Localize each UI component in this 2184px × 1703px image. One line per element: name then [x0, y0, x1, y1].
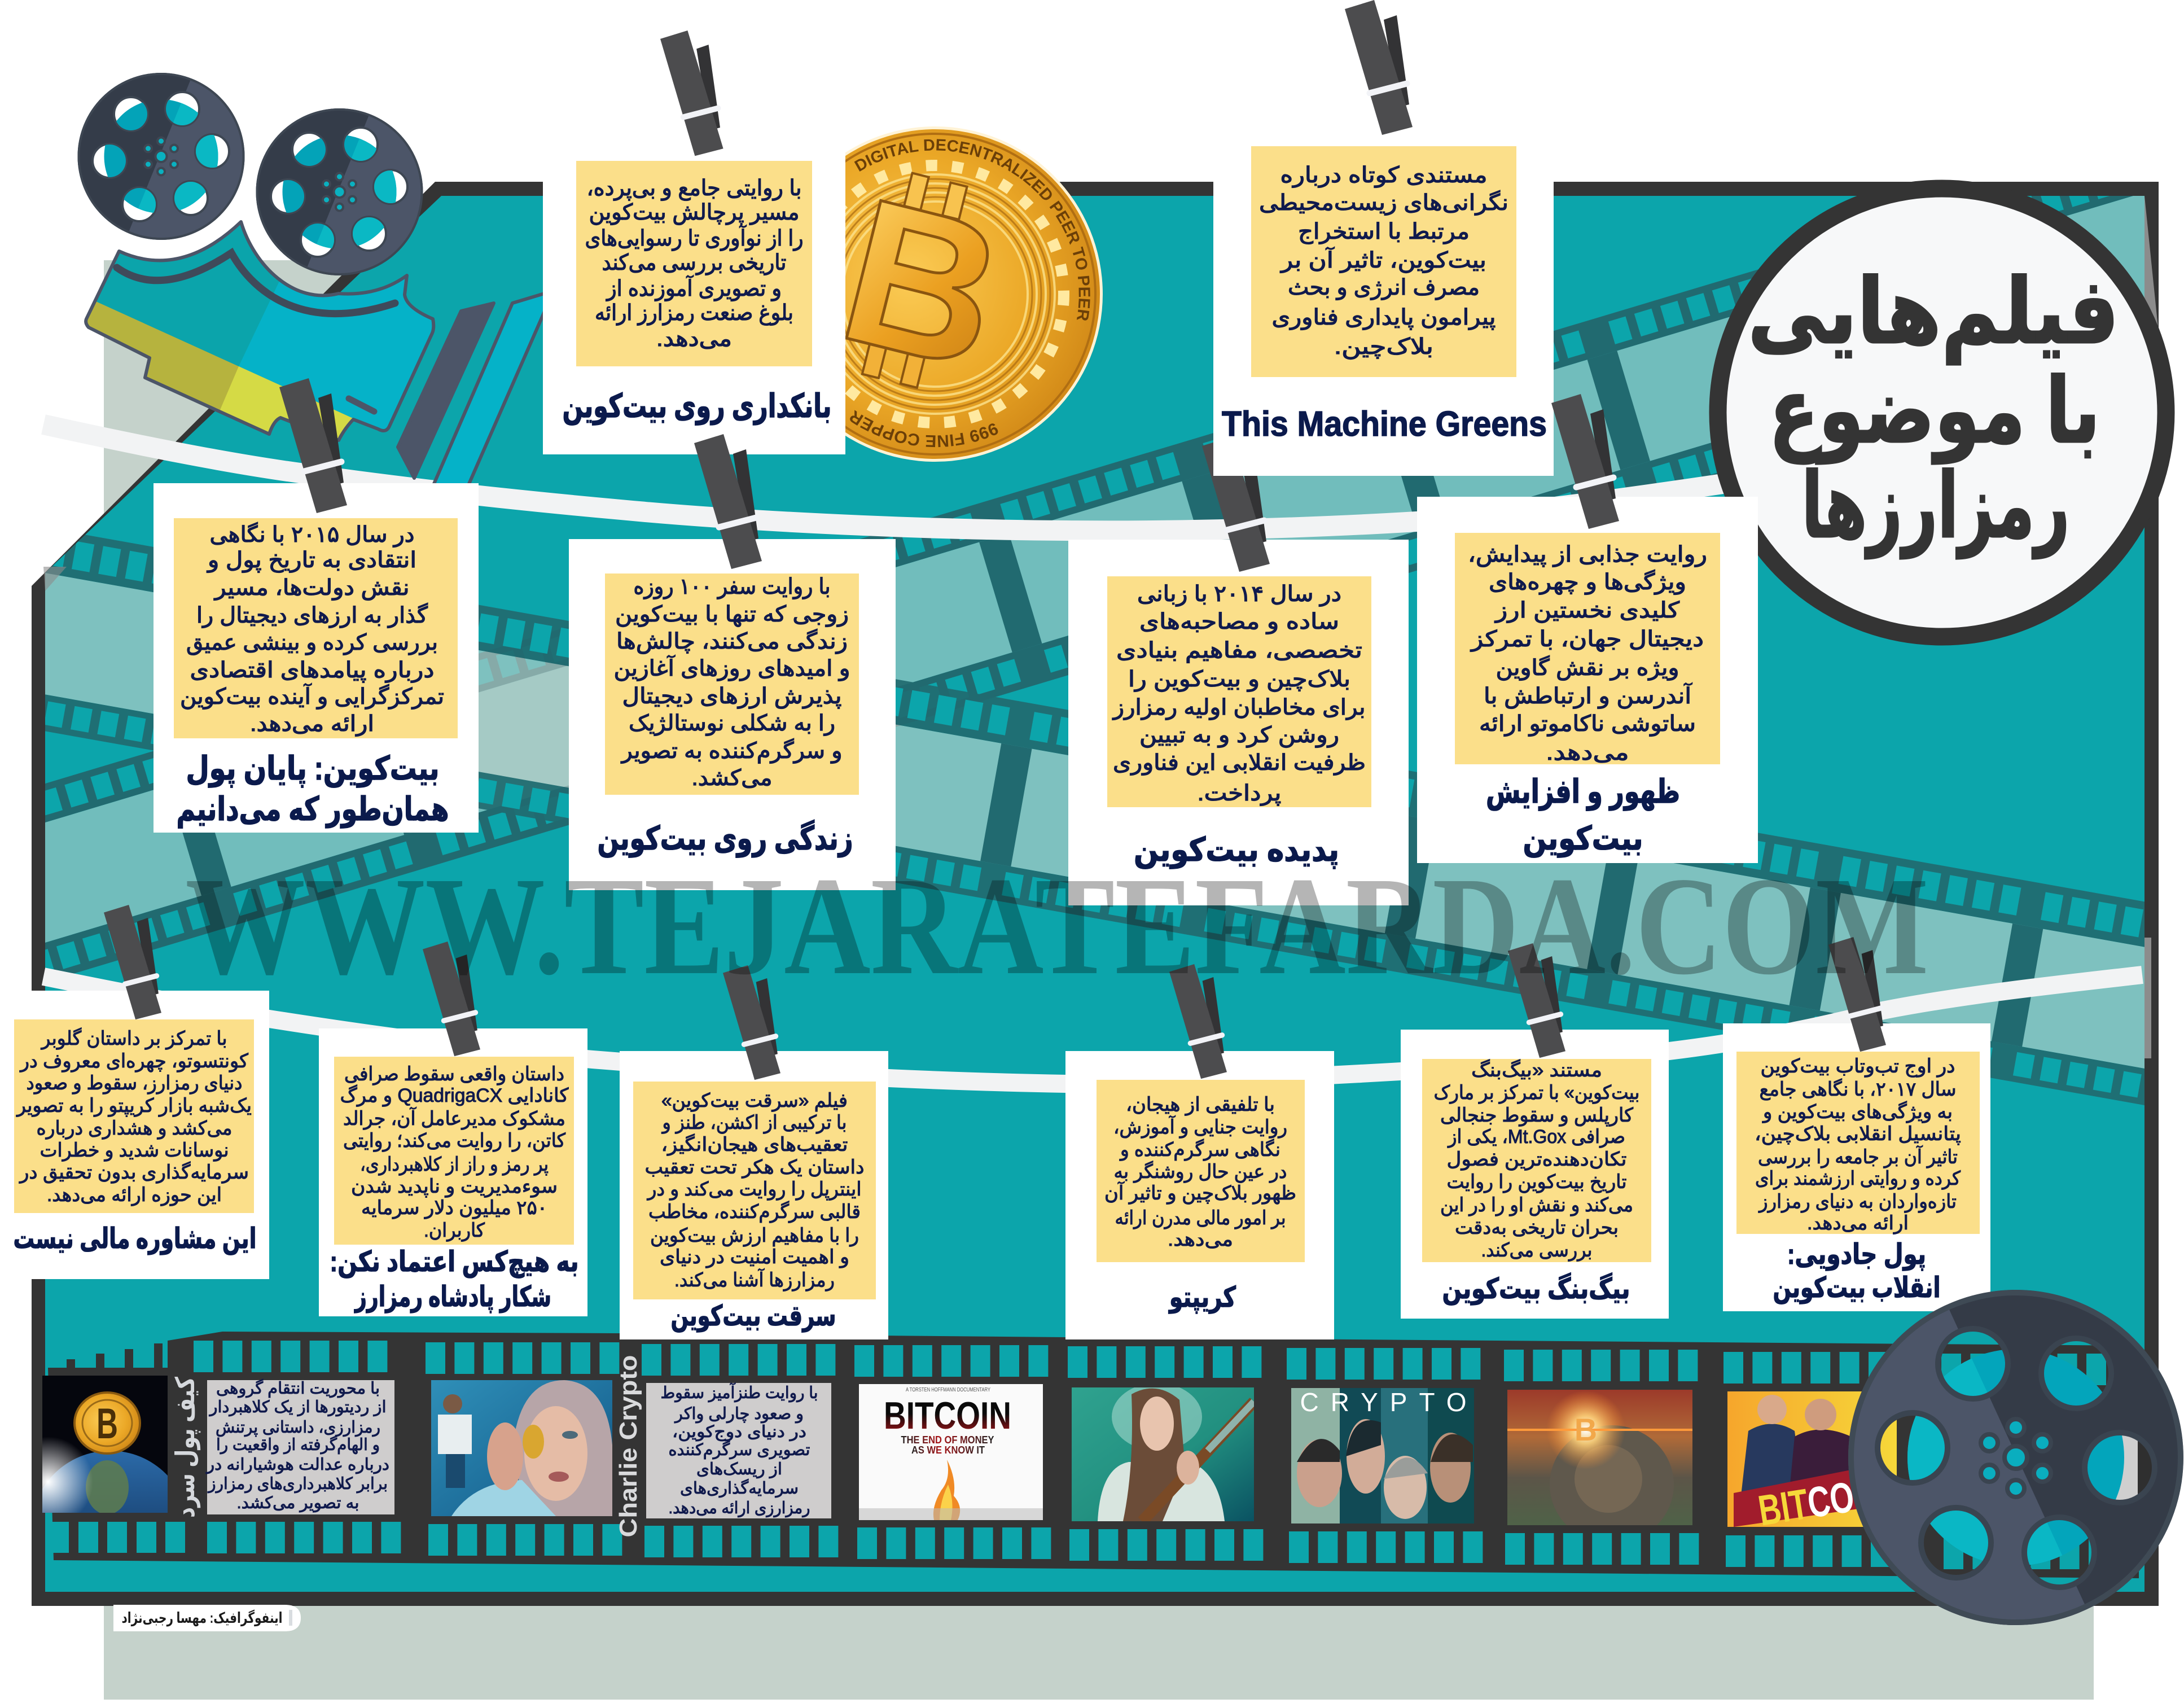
card text: را از نوآوری تا رسوایی‌های	[585, 225, 804, 251]
film card: Banking on Bitcoin	[543, 135, 845, 454]
film strip: descending	[45, 535, 2144, 1105]
card text	[644, 1090, 865, 1292]
card text: و اهمیت امنیت در دنیای	[660, 1246, 849, 1268]
description panel: Charlie Crypto	[646, 1382, 831, 1518]
card text: قالبی سرگرم‌کننده، مخاطب	[648, 1201, 861, 1223]
card text: داستان واقعی سقوط صرافی	[344, 1063, 564, 1085]
card text: با تلفیقی از هیجان،	[1126, 1094, 1275, 1115]
film card: Bitcoin heist	[620, 1051, 888, 1339]
clothesline upper	[43, 424, 1749, 531]
card text: ظهور بلاک‌چین و تاثیر آن	[1104, 1181, 1296, 1205]
card title: پول جادویی:	[1787, 1238, 1926, 1271]
icon: clothespin	[279, 378, 347, 513]
card title: سرقت بیت‌کوین	[670, 1300, 836, 1333]
card text: بلوغ صنعت رمزارز ارائه	[595, 301, 793, 326]
film strip: rising	[45, 196, 2144, 973]
card title: پدیده بیت‌کوین	[1134, 831, 1339, 869]
description panel: cold wallet: به تصویر می‌کشد.	[237, 1494, 359, 1512]
bottom film strip	[42, 1332, 2139, 1578]
card text: ویژه بر نقش گاوین	[1496, 655, 1679, 681]
card title: کریپتو	[1168, 1281, 1236, 1314]
card text: با روایتی جامع و بی‌پرده،	[587, 176, 801, 201]
film card: Trust no one	[319, 1028, 587, 1316]
film card: Bitcoin phenomenon	[1068, 540, 1409, 905]
card text: پذیرش ارزهای دیجیتال	[622, 684, 842, 709]
card text	[1112, 582, 1366, 806]
description panel: Charlie Crypto: رمزارزی ارائه می‌دهد.	[668, 1499, 810, 1517]
golden bitcoin coin	[822, 126, 1103, 462]
icon: clothespin	[1551, 394, 1619, 529]
card text: این حوزه ارائه می‌دهد.	[47, 1184, 222, 1206]
card text: مشکوک مدیرعامل آن، جرالد	[343, 1107, 565, 1130]
film label: cold wallet: کیف پول سرد	[170, 1377, 201, 1518]
film card: Magic money	[1723, 1023, 1990, 1311]
card title	[330, 1246, 579, 1314]
card text	[1104, 1094, 1296, 1250]
coin fine copper lettering: 999 FINE COPPER	[850, 410, 998, 447]
poster: Bitcoin the end of money: THE END OF MONEY	[901, 1434, 994, 1446]
clothesline lower	[43, 975, 2142, 1084]
description panel: cold wallet: برابر کلاهبرداری‌های رمزارز	[207, 1475, 388, 1493]
film strip left teeth	[67, 1343, 163, 1368]
card text: تخصصی، مفاهیم بنیادی	[1116, 638, 1362, 663]
card text	[180, 522, 444, 737]
card text	[614, 575, 850, 790]
card text: نگاهی سرگرم‌کننده و	[1119, 1139, 1280, 1161]
description panel: cold wallet: با محوریت انتقام گروهی	[216, 1379, 380, 1398]
projector lens plate dark	[398, 303, 494, 478]
description panel: Charlie Crypto: با روایت طنزآمیز سقوط	[660, 1382, 818, 1402]
reel hub	[1981, 1419, 2051, 1497]
description panel: Charlie Crypto: تصویری سرگرم‌کننده	[668, 1441, 810, 1459]
card text: سال ۲۰۱۷، با نگاهی جامع	[1760, 1078, 1956, 1100]
poster: Benjamin Franklin with bitcoin: B	[1575, 1412, 1597, 1447]
film card: This Machine Greens	[1213, 113, 1554, 476]
description panel: cold wallet	[205, 1379, 394, 1514]
film strip bottom perforations	[49, 1522, 2137, 1569]
card title	[1773, 1238, 1940, 1304]
card text: مستندی کوتاه درباره	[1280, 163, 1488, 188]
credit label	[113, 1605, 301, 1631]
watermark: WWW.TEJARATEFARDA.COM	[185, 848, 1929, 1004]
card text: مسیر پرچالش بیت‌کوین	[589, 200, 799, 225]
card text: فیلم «سرقت بیت‌کوین»	[661, 1090, 848, 1112]
card text	[1259, 163, 1508, 360]
reel hole tints	[1834, 1310, 2155, 1604]
card text	[1433, 1059, 1640, 1262]
poster: Bitcoin Heist	[1727, 1391, 1897, 1535]
card title: همان‌طور که می‌دانیم	[176, 791, 449, 829]
card text: ارائه می‌دهد.	[1807, 1212, 1909, 1234]
card text	[585, 176, 804, 351]
card title: این مشاوره مالی نیست	[14, 1223, 256, 1255]
card text: کارپلس و سقوط جنجالی	[1440, 1105, 1634, 1127]
card text: گذار به ارزهای دیجیتال را	[196, 603, 428, 628]
bitcoin B symbol: B	[822, 155, 1023, 414]
film card: Bitcoin the end of money	[154, 483, 479, 833]
card text: بیت‌کوین، تاثیر آن بر	[1280, 247, 1486, 273]
card title: بیگ‌بنگ بیت‌کوین	[1442, 1272, 1630, 1306]
icon: clothespin	[723, 965, 780, 1080]
card text: می‌کند و نقش او را در این	[1440, 1194, 1633, 1216]
card title: بیت‌کوین	[1523, 820, 1643, 858]
card text: بلاک‌چین و بیت‌کوین را	[1128, 667, 1350, 692]
card text: روشن کرد و به تبیین	[1139, 723, 1339, 748]
film label: Charlie Crypto: Charlie Crypto	[615, 1355, 642, 1538]
card text: و امیدهای روزهای آغازین	[614, 655, 850, 681]
card title	[176, 750, 449, 829]
poster: coin on globe: B	[97, 1400, 118, 1448]
card text: و سرگرم‌کننده به تصویر	[620, 738, 842, 764]
description panel: Charlie Crypto: از ریسک‌های	[696, 1460, 782, 1478]
card text: پیرامون پایداری فناوری	[1272, 305, 1496, 330]
poster: Bitcoin the end of money: AS WE KNOW IT	[911, 1444, 985, 1456]
card text: کاتن، را روایت می‌کند؛ روایتی	[343, 1130, 566, 1152]
translucent film overlap on frame	[43, 196, 2158, 1058]
card text: بر امور مالی مدرن ارائه	[1115, 1207, 1286, 1229]
icon: clothespin	[694, 434, 762, 569]
description panel: cold wallet: رمزارزی، داستانی پرتنش	[216, 1419, 380, 1437]
card text: برای مخاطبان اولیه رمزارز	[1112, 695, 1366, 720]
icon: clothespin	[660, 30, 723, 156]
large film reel	[1834, 1281, 2183, 1637]
card title: ظهور و افزایش	[1486, 773, 1680, 811]
card text: انتقادی به تاریخ پول و	[207, 548, 416, 573]
icon: projector reel right	[256, 107, 430, 277]
card text: بررسی کرده و بینشی عمیق	[186, 631, 438, 655]
card text	[1755, 1056, 1961, 1234]
card text: نوسانات شدید و خطرات	[40, 1140, 229, 1162]
card text: صرافی Mt.Gox، یکی از	[1447, 1126, 1625, 1148]
poster: woman with rifle	[1072, 1383, 1254, 1521]
card text: در سال ۲۰۱۵ با نگاهی	[210, 522, 414, 548]
film strip top perforations	[194, 1341, 2135, 1385]
description panel: Charlie Crypto: و صعود چارلی واکر	[674, 1405, 804, 1423]
card text: تکان‌دهنده‌ترین فصول	[1447, 1149, 1626, 1171]
card text: می‌کشد و هشداری درباره	[36, 1118, 233, 1140]
card text: زندگی می‌کنند، چالش‌ها	[616, 629, 848, 654]
card text: روایت جذابی از پیدایش،	[1468, 542, 1707, 567]
card title: بانکداری روی بیت‌کوین	[562, 388, 832, 426]
card text: را با مفاهیم ارزش بیت‌کوین	[650, 1225, 859, 1247]
projector lens plate blue	[428, 291, 554, 497]
card text: بیت‌کوین» با تمرکز بر مارک	[1433, 1082, 1640, 1104]
card text: را به شکلی نوستالژیک	[629, 711, 835, 736]
card text: زوجی که تنها با بیت‌کوین	[615, 602, 849, 627]
icon: clothespin	[1828, 937, 1886, 1052]
card text: می‌دهد.	[1546, 741, 1629, 765]
poster: Crypto	[1291, 1387, 1474, 1523]
projector body	[56, 214, 451, 463]
card title: به هیچ‌کس اعتماد نکن:	[330, 1246, 579, 1279]
card text: اینترپل را روایت می‌کند و در	[647, 1179, 861, 1201]
card title: This Machine Greens	[1222, 405, 1547, 444]
card text: مستند «بیگ‌بنگ	[1471, 1059, 1602, 1081]
card text: دنیای رمزارز، سقوط و صعود	[26, 1072, 243, 1095]
icon: clothespin	[1169, 964, 1227, 1079]
card text: در سال ۲۰۱۴ با زبانی	[1137, 582, 1341, 607]
card text: تازه‌واردان به دنیای رمزارز	[1758, 1191, 1957, 1213]
card text: می‌دهد.	[656, 327, 732, 351]
card text: سوءمدیریت و ناپدید شدن	[351, 1176, 558, 1198]
card text: تاریخ بیت‌کوین را روایت	[1447, 1171, 1626, 1193]
card text: با تمرکز بر داستان گلوبر	[41, 1027, 227, 1050]
card text: می‌کشد.	[692, 766, 772, 790]
icon: clothespin	[104, 905, 161, 1019]
film projector	[56, 72, 554, 497]
card title: شکار پادشاه رمزارز	[354, 1281, 551, 1314]
card text: ۲۵۰ میلیون دلار سرمایه	[361, 1197, 547, 1219]
card text	[340, 1063, 569, 1242]
card text: رمزارزها آشنا می‌کند.	[674, 1268, 835, 1292]
icon: clothespin	[1508, 943, 1565, 1058]
card text: پرداخت.	[1198, 781, 1281, 806]
card text: تمرکزگرایی و آینده بیت‌کوین	[180, 683, 444, 710]
card text: پتانسیل انقلابی بلاک‌چین،	[1755, 1123, 1961, 1145]
title circle	[1718, 189, 2166, 637]
description panel: cold wallet: درباره عدالت هوشیارانه در	[205, 1456, 389, 1474]
card text: به ویژگی‌های بیت‌کوین و	[1762, 1101, 1953, 1123]
teal screen	[45, 196, 2144, 1592]
card title	[1486, 773, 1680, 858]
description panel: Charlie Crypto: سرمایه‌گذاری‌های	[680, 1479, 799, 1498]
heading line 2: با موضوع	[1769, 360, 2100, 464]
card text: تاثیر آن بر جامعه را بررسی	[1758, 1145, 1958, 1168]
description panel: cold wallet: از ردیتورها از یک کلاهبردار	[209, 1398, 386, 1416]
film card: Rise and rise of Bitcoin	[1417, 497, 1758, 863]
card text: در عین حال روشنگر به	[1114, 1161, 1287, 1183]
poster: Crypto: CRYPTO	[1300, 1387, 1466, 1417]
card text: نقش دولت‌ها، مسیر	[213, 576, 410, 601]
card text: ساده و مصاحبه‌های	[1139, 610, 1339, 634]
card text: بلاک‌چین.	[1334, 335, 1433, 360]
poster title: BITCO	[1755, 1473, 1857, 1535]
card text: یک‌شبه بازار کریپتو را به تصویر	[16, 1095, 252, 1117]
card text: کاربران.	[424, 1220, 485, 1242]
card text: بررسی می‌کند.	[1481, 1240, 1593, 1262]
poster: woman with coin	[431, 1380, 612, 1516]
card text: ارائه می‌دهد.	[250, 712, 374, 737]
card text: تعقیب‌های هیجان‌انگیز،	[661, 1133, 848, 1156]
card text: در اوج تب‌وتاب بیت‌کوین	[1761, 1056, 1955, 1078]
card text: می‌دهد.	[1168, 1229, 1233, 1250]
card text	[16, 1027, 252, 1206]
card text: روایت جنایی و آموزش،	[1113, 1115, 1287, 1139]
card text	[1468, 542, 1707, 765]
card title: انقلاب بیت‌کوین	[1773, 1272, 1940, 1304]
film card: Big Bang Bitcoin	[1401, 1030, 1669, 1319]
card text: درباره پیامدهای اقتصادی	[190, 658, 435, 683]
description panel: cold wallet: و الهام‌گرفته از واقعیت را	[216, 1435, 380, 1454]
heading line 1: فیلم‌هایی	[1748, 261, 2119, 365]
icon: clothespin	[1345, 0, 1413, 135]
film card: This is not financial advice	[0, 991, 269, 1279]
card text: بحران تاریخی به‌دقت	[1455, 1217, 1619, 1239]
poster: Bitcoin the end of money	[859, 1384, 1043, 1520]
card text: مرتبط با استخراج	[1298, 220, 1470, 244]
icon: clothespin	[1202, 437, 1270, 572]
card text: کلیدی نخستین ارز	[1494, 598, 1679, 623]
card text: تاریخی بررسی می‌کند	[602, 251, 787, 275]
card text: مصرف انرژی و بحث	[1288, 275, 1480, 300]
card text: کرده و روایتی ارزشمند برای	[1755, 1168, 1961, 1190]
film card: Life on Bitcoin	[569, 539, 896, 890]
card text: و تصویری آموزنده از	[606, 275, 782, 301]
card text: ویژگی‌ها و چهره‌های	[1489, 570, 1686, 595]
card text: با روایت سفر ۱۰۰ روزه	[633, 575, 831, 599]
card text: کانادایی QuadrigaCX و مرگ	[340, 1084, 569, 1107]
card text: با ترکیبی از اکشن، طنز و	[661, 1112, 847, 1134]
film card: Crypto	[1065, 1051, 1334, 1339]
card title: زندگی روی بیت‌کوین	[597, 820, 853, 858]
card text: آندرسن و ارتباطش با	[1484, 682, 1692, 709]
sage backdrop panel	[104, 260, 2094, 1700]
card text: پر رمز و راز از کلاهبرداری،	[360, 1154, 549, 1176]
card text: ساتوشی ناکاموتو ارائه	[1479, 712, 1696, 737]
poster: Bitcoin the end of money: BITCOIN	[884, 1394, 1011, 1437]
card text: نگرانی‌های زیست‌محیطی	[1259, 190, 1508, 216]
coin rim lettering: DIGITAL DECENTRALIZED PEER TO PEER	[854, 139, 1090, 321]
poster: coin on globe	[42, 1376, 168, 1513]
background film strips	[45, 196, 2144, 1105]
icon: projector reel left	[78, 72, 252, 241]
credit label: اینفوگرافیک: مهسا رجبی‌نژاد	[122, 1609, 282, 1627]
poster: Bitcoin the end of money: A TORSTEN HOFFMANN DOCUMENTARY	[906, 1387, 990, 1393]
description panel: Charlie Crypto: در دنیای دوج‌کوین،	[672, 1423, 806, 1442]
card text: کونتسوتو، چهره‌ای معروف در	[19, 1050, 249, 1072]
card text: سرمایه‌گذاری بدون تحقیق در	[19, 1161, 249, 1184]
card text: دیجیتال جهان، با تمرکز	[1470, 627, 1704, 652]
icon: clothespin	[423, 942, 480, 1056]
card text: ظرفیت انقلابی این فناوری	[1113, 751, 1366, 776]
poster: Benjamin Franklin with bitcoin	[1507, 1390, 1692, 1544]
card text: داستان یک هکر تحت تعقیب	[644, 1157, 865, 1179]
card title: بیت‌کوین: پایان پول	[186, 750, 439, 788]
